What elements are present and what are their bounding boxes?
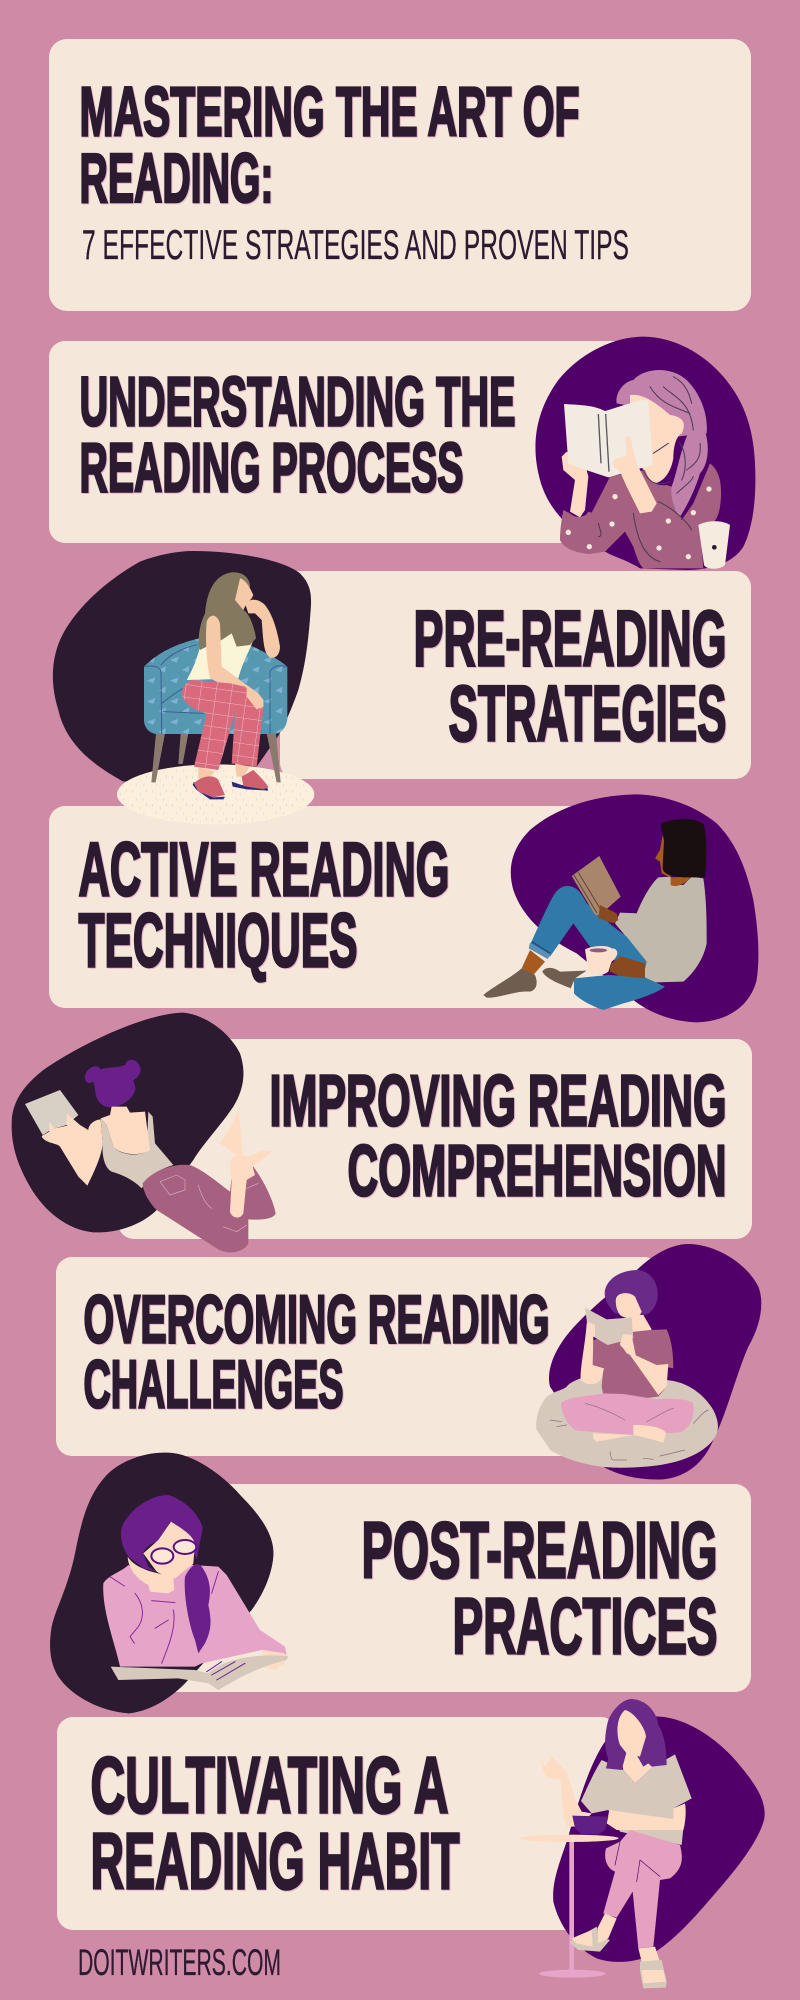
illustration: woman on beanbag reading: [536, 1244, 761, 1480]
panel: overcoming reading challenges: [56, 1244, 761, 1480]
heading: [414, 594, 726, 758]
illustration: woman lying down reading: [12, 1013, 276, 1252]
panel: pre-reading strategies: [53, 551, 751, 824]
heading: [90, 1740, 460, 1906]
heading: [78, 828, 450, 984]
heading: READING PROCESS: [80, 428, 464, 506]
heading: CULTIVATING A: [90, 1740, 448, 1830]
panel: improving reading comprehension: [12, 1013, 752, 1252]
heading: [270, 1062, 726, 1212]
illustration: woman reading with coffee cup: [535, 337, 755, 570]
heading: [80, 362, 516, 506]
panel: understanding the reading process: [49, 337, 755, 570]
illustration: woman with glasses reading: [50, 1453, 288, 1713]
illustration: woman with cup at table: [520, 1699, 765, 1988]
panel: title: [49, 39, 751, 311]
panel: cultivating a reading habit: [57, 1699, 765, 1988]
illustration: woman reading with mug: [483, 794, 758, 1022]
heading: ACTIVE READING: [78, 828, 450, 912]
heading: CHALLENGES: [84, 1346, 344, 1422]
panel: post-reading practices: [50, 1453, 751, 1713]
heading: TECHNIQUES: [78, 898, 358, 984]
footer: website: DOITWRITERS.COM: [78, 1942, 281, 1983]
heading: [84, 1282, 550, 1422]
title: READING:: [80, 139, 274, 217]
illustration: woman thinking in armchair: [53, 551, 314, 824]
title: [80, 72, 580, 217]
panel: active reading techniques: [49, 794, 758, 1022]
heading: READING HABIT: [90, 1816, 460, 1906]
heading: [362, 1506, 718, 1670]
